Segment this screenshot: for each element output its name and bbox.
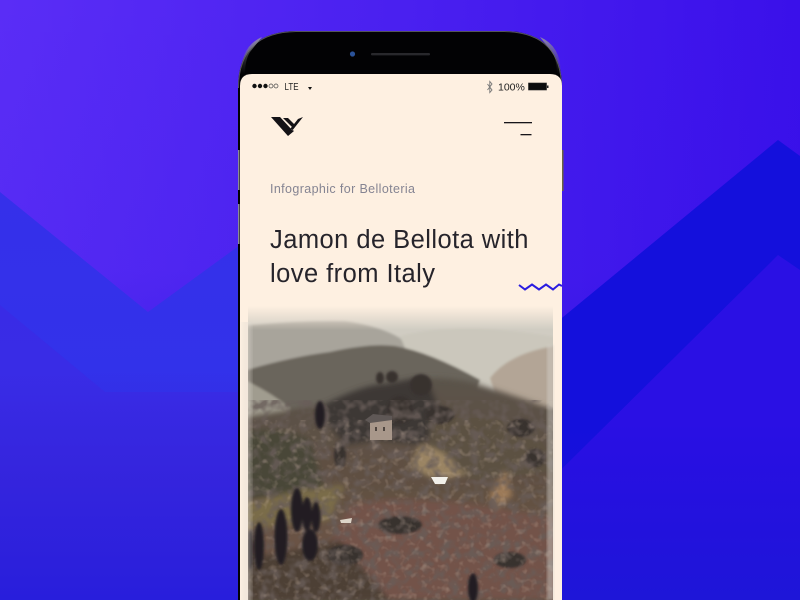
headline [270, 226, 529, 288]
screen [240, 74, 562, 600]
top fade [248, 300, 553, 330]
bluetooth icon [488, 82, 492, 92]
phone [238, 31, 564, 600]
speaker [371, 53, 430, 55]
photo side glare [244, 322, 253, 600]
menu icon [504, 122, 532, 135]
wifi mark [308, 87, 312, 90]
status bar: LTE [284, 82, 299, 93]
headline: love from Italy [270, 260, 435, 288]
signal dots [252, 84, 278, 88]
subtitle: Infographic for Belloteria [270, 182, 415, 196]
phone body [238, 31, 562, 600]
logo [271, 117, 303, 136]
status bar [252, 82, 549, 94]
battery icon [528, 83, 548, 90]
cypress trees [247, 401, 478, 600]
corner glare [241, 37, 262, 74]
photo: hillside [240, 300, 560, 600]
side buttons [238, 150, 240, 190]
mountains: left [0, 192, 240, 600]
status bar: 100% [498, 82, 525, 94]
front camera [350, 51, 355, 57]
zigzag accent [519, 284, 562, 290]
mountains: right [500, 140, 800, 600]
villa [365, 414, 392, 440]
headline: Jamon de Bellota with [270, 226, 529, 254]
